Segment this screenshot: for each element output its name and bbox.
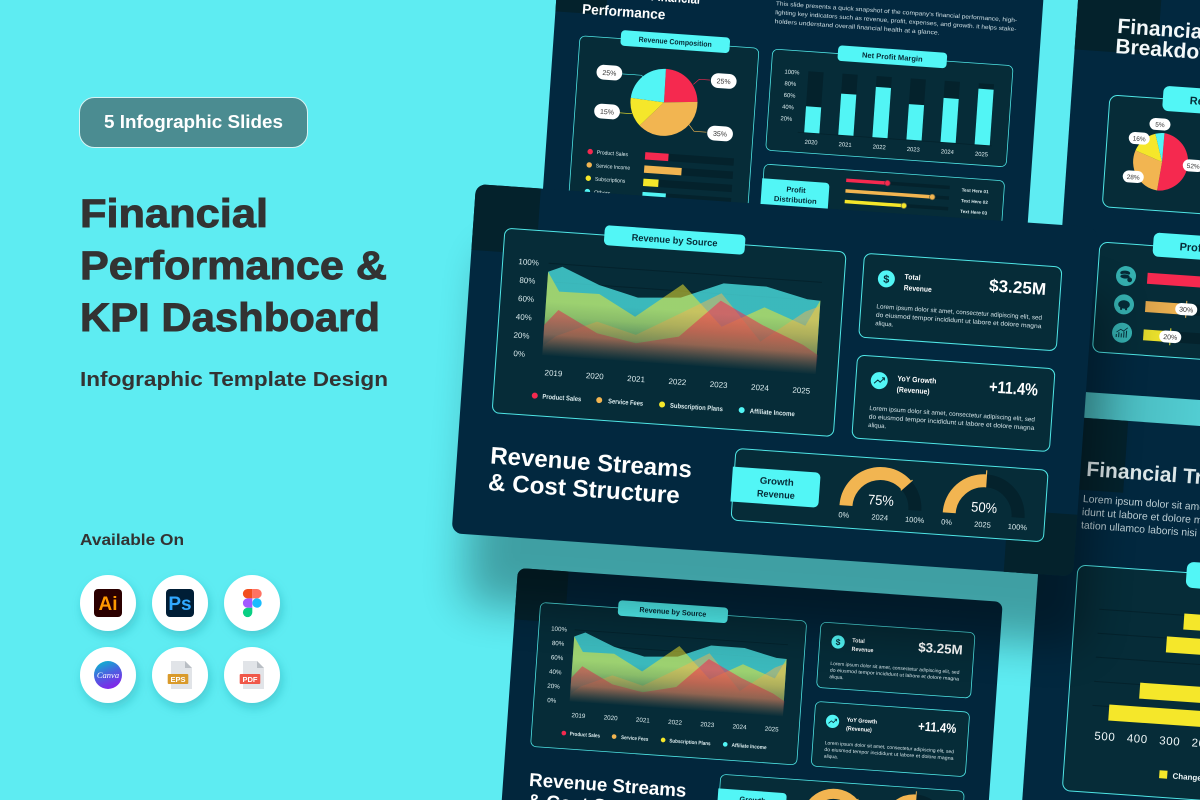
panel: yoy growth: +11.4%: [918, 718, 957, 736]
bar chart: 20%: [780, 116, 792, 123]
panel: yoy growth: do eiusmod tempor incididunt ut labore et dolore magna: [868, 413, 1035, 432]
panel: revenue by source: [531, 595, 807, 765]
legend: Product Sales: [542, 394, 582, 403]
pie chart: 16%: [1132, 135, 1146, 143]
panel: total revenue: $3.25M: [989, 276, 1047, 299]
title: [80, 192, 387, 340]
pie chart: 5%: [1155, 122, 1165, 129]
panel: yoy growth: Lorem ipsum dolor sit amet, consectetur adipiscing elit, sed: [869, 405, 1036, 424]
title: Performance &: [80, 244, 387, 288]
slide heading: [1115, 15, 1200, 66]
panel: revenue by source: Revenue by Source: [631, 232, 718, 249]
icon: Canva: Canva: [97, 670, 119, 680]
gauge: 2024: 100%: [905, 515, 925, 525]
pie chart: 25%: [602, 70, 617, 78]
panel: yoy growth: YoY Growth: [846, 718, 878, 726]
panel: total revenue: aliqua.: [875, 320, 894, 328]
legend: Affiliate Income: [731, 743, 767, 751]
panel: total revenue: Revenue: [851, 647, 874, 654]
gauge: 2025: [941, 467, 1031, 532]
icon: Adobe Illustrator: [80, 575, 136, 631]
pie chart: [592, 64, 737, 142]
icon: EPS file: [152, 647, 208, 703]
area chart: 40%: [549, 669, 562, 676]
slide heading: Performance: [582, 1, 666, 22]
panel: revenue composition: Revenue Composition: [638, 35, 713, 49]
panel: total revenue: Lorem ipsum dolor sit amet, consectetur adipiscing elit, sed: [830, 661, 960, 676]
bar chart: [779, 69, 996, 159]
slide: financial trends (lower right): [1014, 415, 1200, 800]
panel: profit bars with icons: [1092, 229, 1200, 367]
intro paragraph: [774, 1, 1017, 42]
icon: Figma: [224, 575, 280, 631]
panel: horizontal bar chart: [1062, 554, 1200, 800]
bar chart: 40%: [782, 105, 794, 111]
panel: revenue by source: Revenue by Source: [639, 605, 707, 619]
area chart: 0%: [513, 349, 525, 359]
area chart: 2025: [765, 726, 779, 734]
bar chart: 60%: [783, 93, 796, 100]
intro paragraph: [1081, 494, 1200, 554]
legend: Subscription Plans: [670, 403, 723, 413]
area chart: 100%: [551, 626, 568, 634]
area chart: 2022: [668, 719, 683, 727]
legend with bars: [584, 148, 734, 206]
area chart: 2023: [709, 380, 728, 390]
panel: growth revenue: Revenue: [756, 488, 795, 502]
slide heading: [487, 442, 693, 510]
pie chart: 35%: [713, 131, 727, 139]
panel: growth revenue: [715, 774, 964, 800]
area chart: [545, 626, 790, 734]
icon: EPS file: EPS: [170, 675, 186, 684]
area chart: 20%: [547, 683, 560, 691]
panel: total revenue: do eiusmod tempor incididunt ut labore et dolore magna: [876, 312, 1042, 330]
panel: yoy growth: YoY Growth: [897, 374, 937, 386]
intro paragraph: This slide presents a quick snapshot of the company's financial performance, high-: [776, 1, 1017, 24]
panel: total revenue: [816, 622, 975, 698]
pie chart: [1122, 116, 1200, 194]
panel: total revenue: [859, 253, 1062, 351]
panel: profit bars with icons: 30%: [1179, 307, 1193, 315]
panel: yoy growth: [811, 701, 970, 777]
bar chart: 2023: [907, 147, 920, 154]
panel: revenue by source: [492, 218, 847, 437]
area chart: 80%: [552, 640, 565, 648]
panel: total revenue: do eiusmod tempor incididunt ut labore et dolore magna: [830, 668, 960, 683]
panel: profit distribution: [759, 164, 1005, 239]
gauge: 2024: 0%: [838, 510, 850, 520]
panel: yoy growth: aliqua.: [868, 422, 887, 430]
gauge: 2024: [800, 792, 870, 800]
slide heading: & Cost Structure: [487, 469, 681, 509]
gauge: 2024: 75%: [867, 491, 894, 509]
slide heading: Revenue Streams: [489, 442, 693, 483]
panel: total revenue: $3.25M: [918, 640, 963, 658]
panel: yoy growth: (Revenue): [896, 385, 930, 396]
gauge: 2025: 50%: [971, 498, 998, 516]
panel: yoy growth: Lorem ipsum dolor sit amet, consectetur adipiscing elit, sed: [825, 740, 954, 755]
icon: piggy bank: [1113, 294, 1135, 315]
legend with bars: Others: [594, 190, 611, 197]
legend: [561, 731, 767, 751]
slide heading: Revenue Streams: [529, 769, 687, 800]
icon: PDF file: PDF: [242, 675, 258, 684]
panel: profit distribution: Profit: [786, 185, 807, 195]
panel: yoy growth: +11.4%: [988, 377, 1039, 400]
panel: horizontal bar chart: 400: [1126, 733, 1148, 746]
slide: revenue streams (main): [452, 184, 1097, 577]
panel: yoy growth: aliqua.: [824, 754, 838, 760]
area chart: 60%: [551, 654, 564, 662]
legend with bars: Product Sales: [597, 150, 628, 158]
panel: profit distribution: Text Here 01: [962, 187, 989, 194]
title: KPI Dashboard: [80, 296, 380, 340]
slide shadow: main slide: [464, 254, 1109, 647]
subtitle: Infographic Template Design: [80, 368, 388, 391]
intro paragraph: lighting key indicators such as revenue, profit, expenses, and growth. it helps stake-: [775, 10, 1017, 33]
area chart: 2025: [792, 386, 811, 396]
panel: total revenue: Revenue: [904, 283, 932, 294]
gauge: 2025: 2025: [974, 520, 991, 530]
panel: profit bars with icons: 20%: [1163, 334, 1177, 342]
legend: Subscription Plans: [669, 738, 711, 747]
area chart: 2019: [571, 712, 586, 720]
area chart: 2024: [732, 723, 747, 731]
panel: total revenue: $: [835, 637, 841, 647]
legend: Product Sales: [569, 731, 600, 740]
panel: yoy growth: (Revenue): [846, 726, 872, 734]
bar chart: 2020: [804, 140, 818, 147]
panel: horizontal bar chart: 500: [1094, 731, 1116, 744]
legend: Affiliate Income: [750, 408, 795, 418]
bar chart: 100%: [784, 70, 800, 77]
bar chart: 2021: [838, 142, 852, 149]
title: Financial: [80, 192, 268, 236]
gauge: 2025: [881, 789, 951, 800]
gauge: 2024: 2024: [871, 512, 888, 523]
icon: Adobe Photoshop: [152, 575, 208, 631]
panel: total revenue: aliqua.: [829, 674, 844, 681]
icon: Adobe Illustrator: Ai: [98, 594, 118, 615]
area chart: 2020: [586, 371, 605, 381]
panel: profit distribution: Distribution: [774, 194, 818, 206]
bar chart: 2024: [941, 149, 955, 156]
legend: Service Fees: [621, 735, 649, 743]
icon: Canva: [80, 647, 136, 703]
slide: financial breakdown (right): [1051, 0, 1200, 417]
icon: growth chart: [1111, 322, 1133, 343]
legend with bars: Service Income: [596, 163, 630, 172]
panel: yoy growth: [852, 355, 1055, 452]
area chart: 2021: [627, 374, 646, 384]
legend: Service Fees: [608, 398, 643, 408]
area chart: 2022: [668, 377, 687, 387]
panel: total revenue: $: [883, 274, 890, 286]
area chart: 60%: [518, 294, 534, 304]
area chart: [511, 257, 824, 396]
panel: yoy growth: do eiusmod tempor incididunt ut labore et dolore magna: [824, 747, 954, 762]
panel: revenue composition: [568, 27, 760, 221]
panel: net profit margin: [766, 41, 1014, 167]
panel: total revenue: Total: [904, 272, 921, 282]
pie chart: 15%: [600, 109, 614, 117]
legend with bars: Subscriptions: [595, 177, 626, 185]
area chart: 2019: [544, 368, 563, 379]
icon: PDF file: [224, 647, 280, 703]
area chart: 2021: [636, 717, 651, 725]
intro paragraph: holders understand overall financial health at a glance.: [774, 19, 940, 37]
area chart: 80%: [519, 276, 536, 286]
pie chart: 28%: [1126, 174, 1140, 182]
slide: financial overview (top): [540, 0, 1044, 266]
slide: revenue streams (bottom copy): [499, 568, 1003, 800]
gauge: 2024: [838, 471, 928, 525]
bar chart: 2022: [872, 144, 886, 151]
area chart: 2023: [700, 721, 715, 729]
panel: profit distribution: Text Here 03: [960, 209, 988, 216]
area chart: 20%: [513, 331, 530, 341]
pie chart: 25%: [716, 78, 731, 86]
gauge: 2025: 0%: [941, 517, 953, 527]
slide heading: [582, 0, 701, 25]
panel: total revenue: Lorem ipsum dolor sit amet, consectetur adipiscing elit, sed: [876, 303, 1043, 322]
icon: Adobe Photoshop: Ps: [168, 594, 192, 615]
panel: revenue pie: [1102, 82, 1200, 222]
gauge: 2025: 100%: [1008, 522, 1028, 532]
area chart: 2024: [751, 383, 770, 393]
badge: 5 infographic slides: 5 Infographic Slides: [104, 111, 283, 132]
panel: growth revenue: Growth: [759, 476, 794, 489]
panel: total revenue: Total: [852, 638, 865, 645]
area chart: 2020: [603, 714, 618, 722]
area chart: 0%: [547, 697, 557, 705]
band shadow between right slides: [1036, 366, 1200, 451]
area chart: 40%: [516, 312, 532, 322]
area chart: 100%: [518, 257, 539, 268]
panel: growth revenue: [729, 448, 1048, 542]
pie chart: 52%: [1186, 163, 1200, 171]
badge: 5 infographic slides: [80, 98, 308, 148]
panel: horizontal bar chart: 300: [1159, 735, 1181, 749]
bar chart: 2025: [975, 152, 988, 159]
panel: net profit margin: Net Profit Margin: [862, 50, 923, 64]
panel: profit distribution: Text Here 02: [961, 198, 989, 205]
available on heading: Available On: [80, 532, 184, 549]
icon: coins: [1115, 265, 1137, 287]
legend: [531, 392, 795, 418]
bar chart: 80%: [784, 81, 796, 88]
